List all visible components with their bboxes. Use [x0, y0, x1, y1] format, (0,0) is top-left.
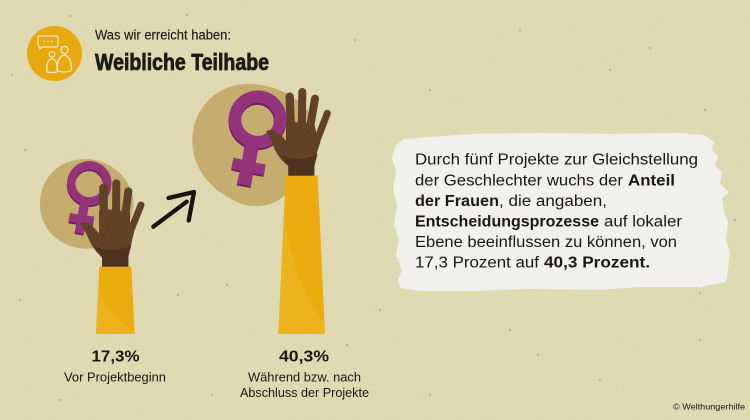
figure: left raised hand 17,3%: [40, 159, 141, 334]
panel: text callout: , die angaben,: [499, 193, 607, 210]
icon: people with speech bubble: [27, 26, 82, 81]
icon: right hand: [266, 92, 327, 176]
icon: left female symbol: [68, 165, 107, 236]
panel: text callout: 40,3 Prozent.: [544, 254, 650, 272]
arrow: [153, 192, 194, 227]
title: Weibliche Teilhabe: [95, 49, 269, 75]
panel: text callout: 17,3 Prozent auf: [415, 254, 540, 272]
blob: right background: [192, 84, 312, 206]
icon: left hand: [80, 183, 141, 267]
panel: text callout: Ebene beeinflussen zu können, von: [415, 234, 677, 251]
label: during or after project: [240, 370, 369, 400]
panel: text callout: Entscheidungsprozesse: [415, 214, 599, 230]
figure: right raised hand 40,3%: [192, 84, 327, 334]
blob: left background: [40, 159, 133, 249]
icon: right female symbol: [231, 97, 280, 188]
left sleeve: [96, 267, 135, 334]
label: during or after project: Abschluss der Projekte: [240, 386, 369, 400]
panel: text callout: auf lokaler: [604, 214, 682, 230]
stat: 17,3%: 17,3%: [92, 348, 140, 366]
right sleeve: [278, 176, 325, 334]
panel: text callout: der Geschlechter wuchs der: [415, 172, 623, 190]
panel: text callout: Durch fünf Projekte zur Gleichstellung: [415, 152, 698, 168]
copyright: © Welthungerhilfe: [673, 402, 746, 412]
header intro text: Was wir erreicht haben:: [95, 28, 231, 42]
panel: text callout: Anteil: [628, 172, 675, 190]
panel: text callout: der Frauen: [415, 193, 499, 210]
label: before project: Vor Projektbeginn: [64, 370, 166, 384]
stat: 40,3%: 40,3%: [279, 348, 329, 366]
label: during or after project: Während bzw. nach: [248, 370, 361, 384]
panel: text callout: [392, 133, 730, 291]
